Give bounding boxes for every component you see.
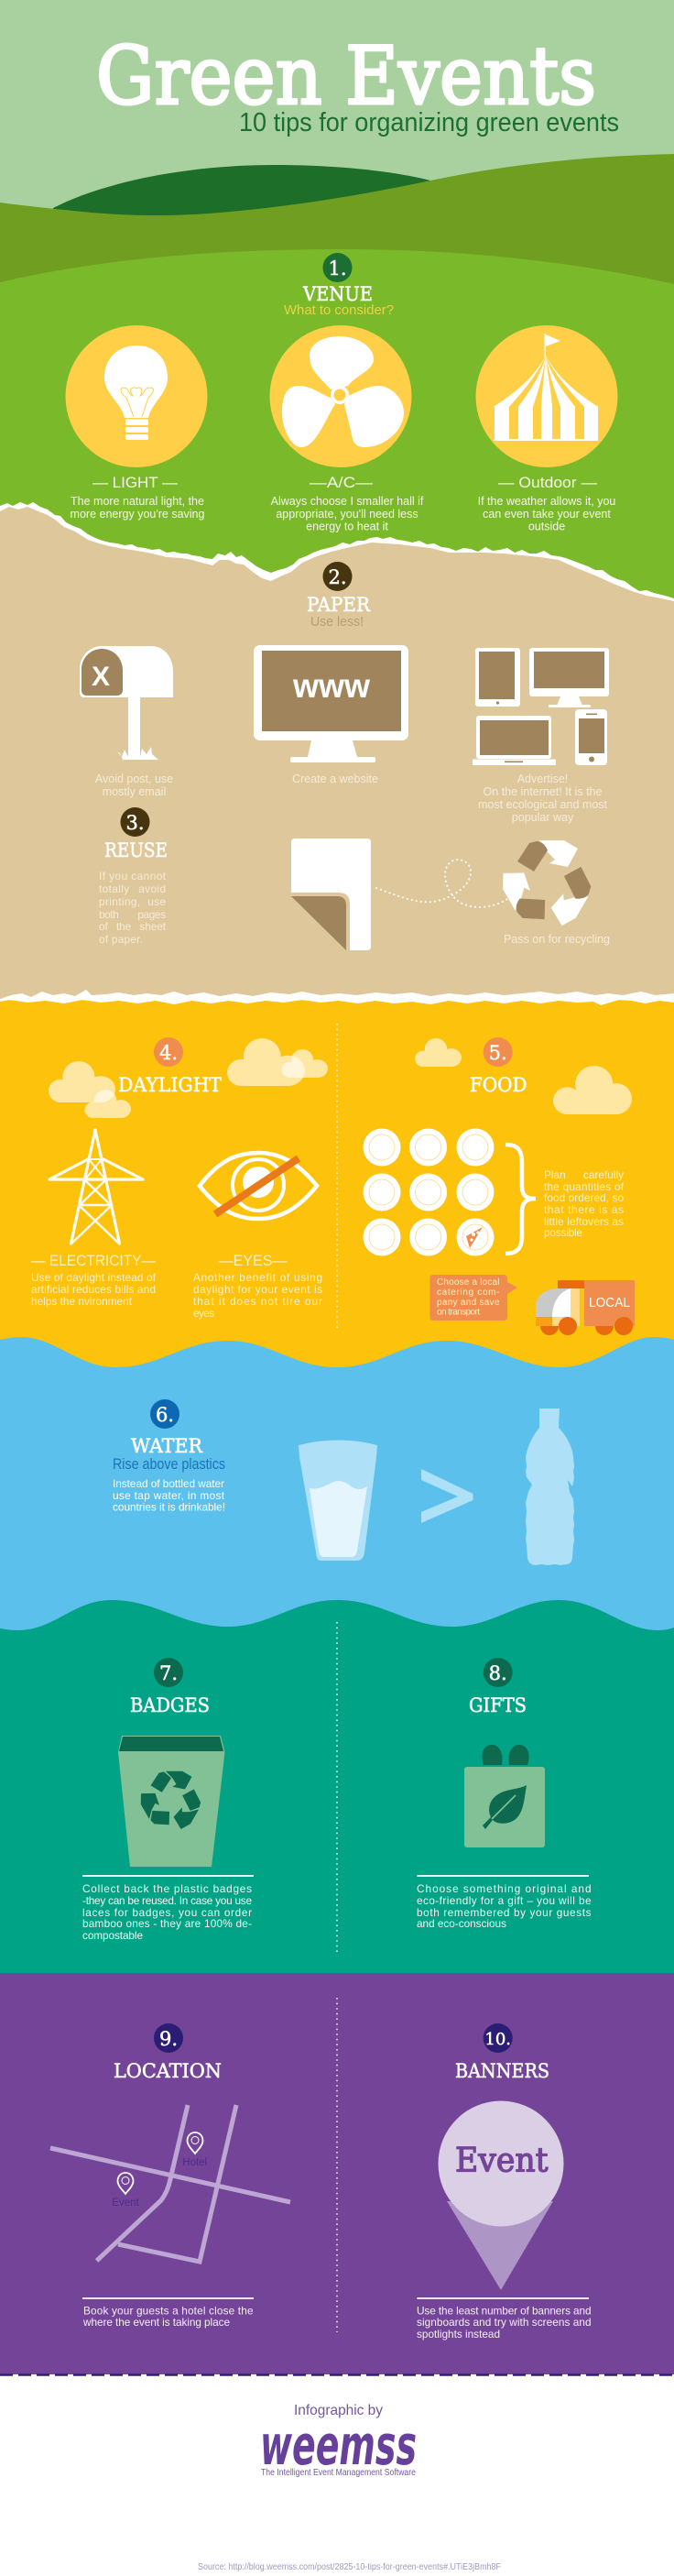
text: eyes: eyes [193,1307,214,1320]
heading: water: WATER [131,1435,203,1457]
torn paper edge: top [0,495,674,601]
icon: mailbox [80,646,173,760]
icon: gift with leaf [464,1745,545,1847]
subheading: rise above plastics: Rise above plastics [113,1455,225,1473]
panel: 2 paper and 3 reuse [0,486,674,1005]
icon: plates [363,1129,495,1255]
divider [336,1024,338,1331]
text: create a website: Create a website [292,773,378,785]
text: light: The more natural light, the [71,495,204,508]
text: electricity: artificial reduces bills and [31,1283,156,1296]
icon: fan [269,325,412,467]
text: location: where the event is taking place [82,2316,230,2329]
text: food [544,1168,625,1239]
text: source: Source: http://blog.weemss.com/post/2825-10-tips-for-green-events#.UTiE3jBmh8F [198,2561,501,2572]
text: reuse: printing, use [99,895,166,908]
rule [417,1875,589,1877]
text: gifts: and eco-conscious [417,1917,506,1930]
dotted path [376,860,507,907]
icon: mailbox: X [92,662,110,692]
text: badges: Collect back the plastic badges [82,1882,252,1895]
text: banners: Use the least number of banners and [417,2304,592,2317]
text: electricity: helps the nvironment [31,1295,133,1308]
text: outdoor: If the weather allows it, you [478,495,615,508]
subtitle: 10 tips for organizing green events [239,108,619,137]
number 4 [154,1037,183,1067]
text: reuse: of paper. [99,933,143,946]
text: advertise: Advertise! [517,773,568,785]
text: food: Plan carefully [544,1168,624,1181]
heading: badges: BADGES [130,1694,210,1716]
panel: footer [0,2374,674,2576]
text: reuse: If you cannot [99,870,167,882]
text: avoid post [95,773,173,798]
text: advertise: popular way [512,811,574,824]
subheading: use less: Use less! [310,614,364,630]
text: advertise [478,773,608,824]
number 10: 10. [484,2030,511,2049]
icon: event banner pin [438,2100,564,2290]
text: reuse: both pages [99,908,166,921]
text: outdoor: can even take your event [483,508,611,521]
icon: local truck: LOCAL [589,1295,630,1310]
number 10 [484,2023,513,2053]
title: Green Events [96,29,596,123]
number 5 [484,1037,513,1067]
text: gifts: Choose something original and [417,1882,592,1895]
text: reuse: of the sheet [99,920,167,933]
number 9: 9. [159,2028,178,2050]
number 1 [322,253,352,282]
text: food: the quantities of [544,1180,625,1193]
text: infographic by: Infographic by [294,2403,383,2418]
divider [336,1998,338,2332]
text: badges: laces for badges, you can order [82,1906,252,1919]
pin: hotel: Hotel [182,2157,207,2168]
text: banners [417,2304,592,2340]
callout: local catering [430,1275,517,1321]
pin: event: Event [112,2198,140,2209]
torn paper edge: bottom [0,990,674,1005]
rule [82,2297,254,2299]
number 7: 7. [159,1662,178,1684]
text: gifts: eco-friendly for a gift – you will be [417,1894,592,1907]
text: food: that there is as [544,1203,624,1216]
icon: circus tent [476,325,617,467]
number 2: 2. [328,566,347,588]
panel: 4 daylight and 5 food [0,995,674,1371]
text: eyes: Another benefit of using [193,1271,322,1284]
logo: weemss: weemss [260,2414,417,2478]
icon: curly bracket [506,1145,536,1254]
rule [417,2297,589,2299]
text: food: possible [544,1226,582,1239]
heading: paper: PAPER [307,594,371,616]
heading: venue: VENUE [302,283,373,305]
text: avoid post: mostly email [103,785,166,798]
icon: electricity pylon [49,1130,143,1244]
text: advertise: most ecological and most [478,798,608,811]
subheading: what to consider: What to consider? [284,302,394,318]
text: water: use tap water, in most [113,1489,225,1502]
text: location: Book your guests a hotel close the [83,2304,254,2317]
text: light: more energy you're saving [71,508,205,521]
pin: event [112,2173,140,2209]
heading: daylight: DAYLIGHT [118,1074,222,1096]
rule [82,1875,254,1877]
text: a/c: Always choose I smaller hall if [271,495,424,508]
number 3: 3. [125,812,145,834]
icon: clouds [49,1038,632,1118]
heading: banners: BANNERS [455,2060,549,2082]
number 2 [322,562,352,591]
heading: reuse: REUSE [104,839,168,861]
icon: local truck [536,1280,635,1335]
panel: 1 venue [0,249,674,601]
icon: recycling symbol [496,840,599,930]
panel: 6 water [0,1337,674,1650]
number 6: 6. [156,1404,174,1426]
text: gifts: both remembered by your guests [417,1906,592,1919]
icon: website monitor [254,645,408,762]
text: advertise: On the internet! It is the [484,785,603,798]
panel: 9 location and 10 banners [0,1973,674,2374]
icon: recycling bin [118,1736,225,1867]
number 1: 1. [328,258,347,280]
text: reuse [99,870,167,946]
callout: local catering: catering com- [437,1288,500,1298]
icon: glass of water [299,1441,377,1561]
text: food: food ordered, so [544,1191,624,1204]
text: badges: -they can be reused. In case you use [82,1894,252,1907]
text: light [71,495,205,521]
text: electricity: Use of daylight instead of [31,1271,157,1284]
heading: gifts: GIFTS [469,1694,527,1716]
divider [336,1622,338,1955]
text: electricity [31,1271,157,1308]
text: badges [82,1882,252,1942]
icon: greater than [421,1469,473,1523]
callout: local catering: pany and save [437,1298,500,1308]
text: water: countries it is drinkable! [113,1501,225,1514]
icon: crossed eye [200,1153,317,1219]
number 8: 8. [489,1662,507,1684]
label: light: — LIGHT — [92,474,178,491]
text: avoid post: Avoid post, use [95,773,173,785]
text: reuse: totally avoid [99,882,166,895]
text: a/c: appropriate, you'll need less [276,508,419,521]
icon: event banner pin: Event [455,2142,549,2179]
number 7 [154,1658,183,1687]
number 9 [154,2023,183,2053]
text: location [82,2304,254,2329]
text: eyes: that it does not tire our [193,1295,322,1308]
text: gifts [417,1882,592,1930]
text: banners: signboards and try with screens and [417,2316,592,2329]
number 4: 4. [159,1042,178,1064]
number 6 [150,1399,179,1429]
number 3 [121,807,150,837]
number 8 [484,1658,513,1687]
icon: plastic bottle [526,1409,574,1565]
callout: local catering: Choose a local [437,1277,500,1288]
text: a/c [271,495,424,533]
number 5: 5. [489,1042,507,1064]
text: badges: compostable [82,1929,143,1942]
text: pass on for recycling: Pass on for recycling [504,933,610,946]
text: eyes [193,1271,322,1320]
label: outdoor: — Outdoor — [498,474,597,491]
icon: light bulb [66,325,207,467]
text: a/c: energy to heat it [306,521,388,533]
text: badges: bamboo ones - they are 100% de- [82,1917,252,1930]
icon: website monitor: www [292,667,370,705]
heading: location: LOCATION [114,2060,222,2082]
text: outdoor: outside [528,521,565,533]
icon: tablet, monitor, laptop and phone [473,648,609,765]
label: electricity: — ELECTRICITY— [31,1252,156,1269]
text: water: Instead of bottled water [113,1477,224,1490]
map: streets and pins [50,2105,290,2262]
panel: 7 badges and 8 gifts [0,1600,674,1979]
icon: folded sheet of paper [291,839,371,950]
text: water [113,1477,225,1514]
pin: hotel [182,2132,207,2168]
callout: local catering: on transport [437,1307,480,1318]
panel: header sky and hills [0,0,674,302]
text: outdoor [478,495,615,533]
text: tagline: The Intelligent Event Management Software [261,2467,416,2478]
label: eyes: —EYES— [218,1252,288,1269]
text: banners: spotlights instead [417,2328,500,2340]
heading: food: FOOD [470,1074,527,1096]
label: a/c: —A/C— [310,474,373,491]
text: eyes: daylight for your event is [193,1283,322,1296]
text: food: little leftovers as [544,1215,624,1228]
